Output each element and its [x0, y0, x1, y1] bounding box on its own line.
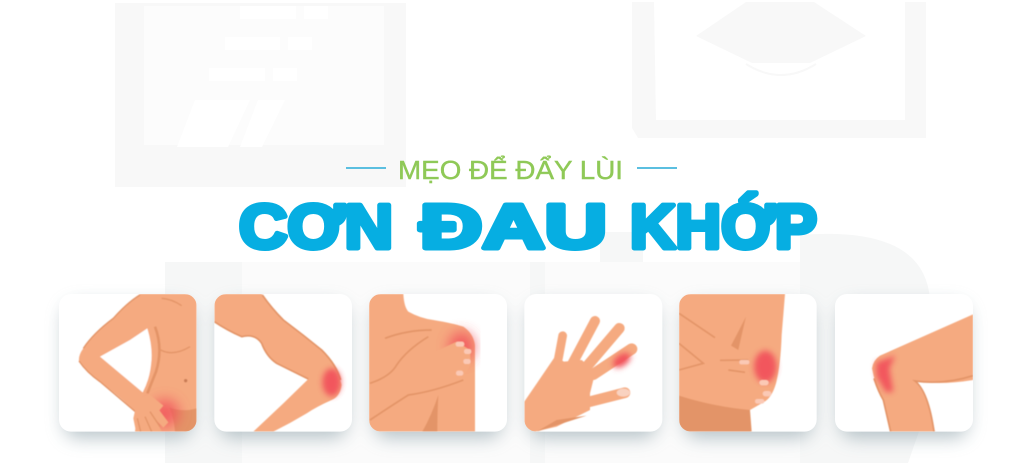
panel: side pain [679, 294, 817, 432]
title: KHỚP [630, 193, 817, 262]
panel: hip pain [59, 294, 197, 432]
card shadows [64, 304, 968, 438]
panel: knee pain [835, 294, 973, 432]
panel: finger pain [524, 294, 662, 432]
title: CƠN [239, 193, 393, 262]
background: faded illustrations [115, 2, 930, 463]
panel: elbow pain [214, 294, 352, 432]
subtitle: MẸO ĐỂ ĐẨY LÙI [398, 155, 623, 185]
panel: shoulder pain [369, 294, 507, 432]
title [239, 193, 817, 262]
title: ĐAU [420, 193, 607, 262]
